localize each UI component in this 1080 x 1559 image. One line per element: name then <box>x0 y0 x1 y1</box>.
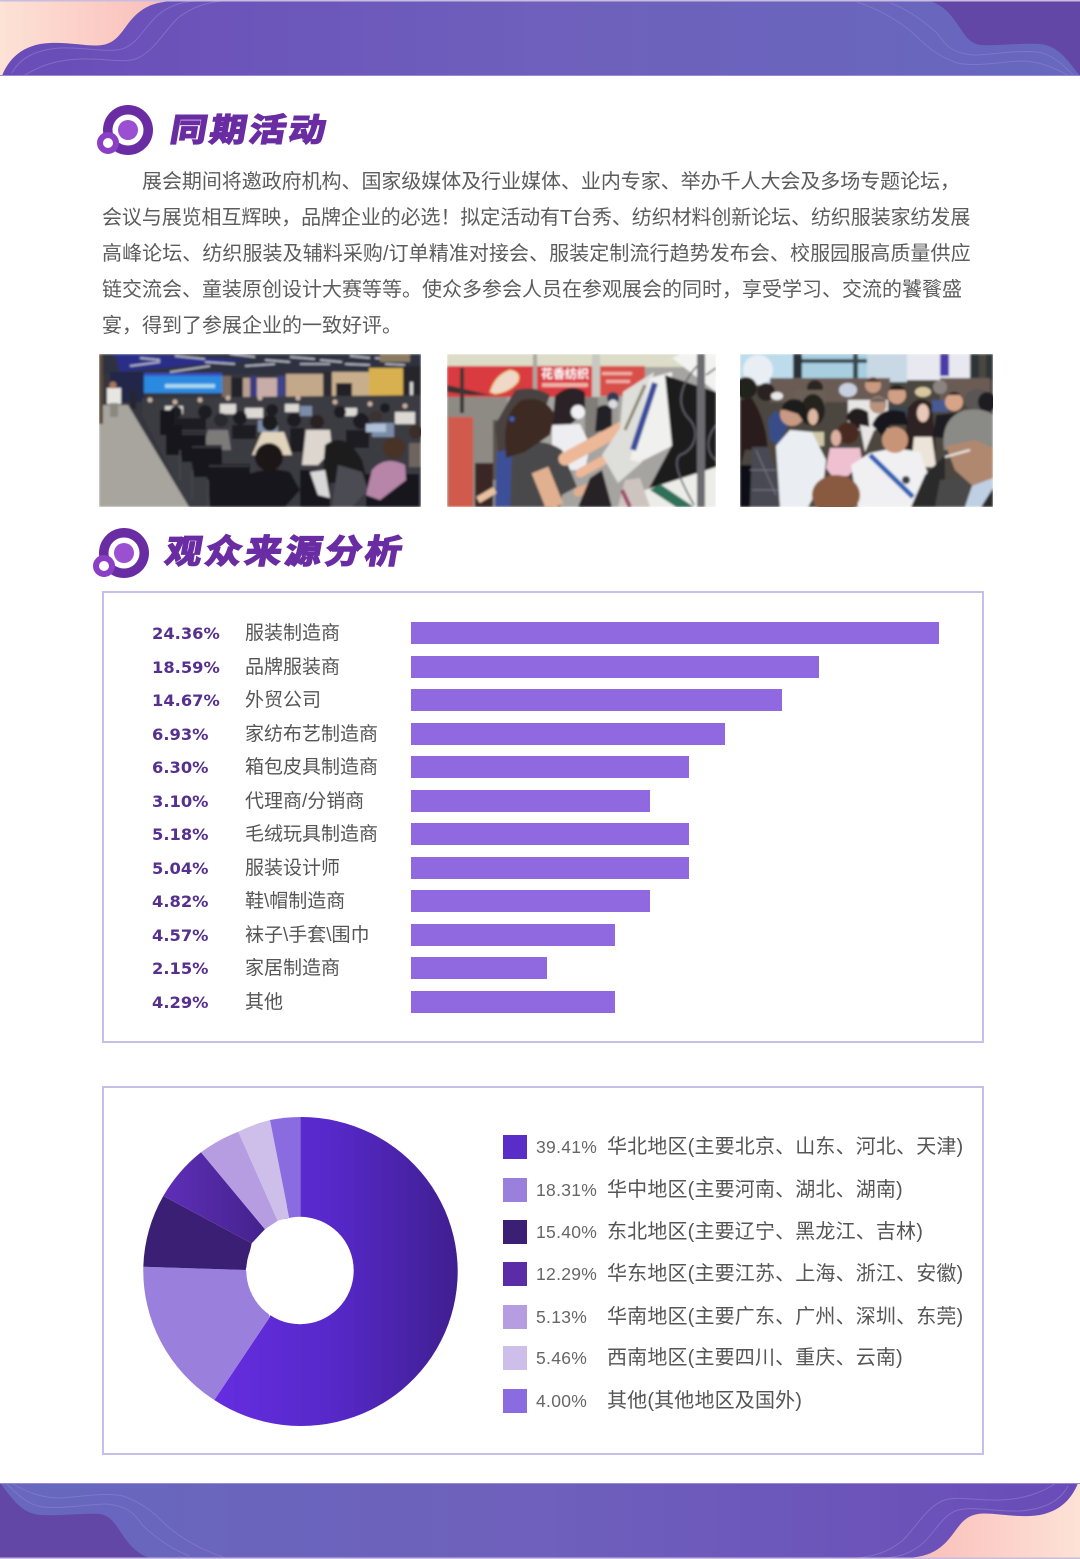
bar row: 服装制造商: 24.36% <box>152 624 220 643</box>
top banner <box>0 0 1080 76</box>
bar row: 服装设计师: 服装设计师 <box>245 858 340 879</box>
body paragraph: 会议与展览相互辉映，品牌企业的必选！拟定活动有T台秀、纺织材料创新论坛、纺织服装家纺发展 <box>102 207 970 229</box>
section heading: 观众来源分析 <box>93 528 409 578</box>
legend item: 华东地区: 华东地区(主要江苏、上海、浙江、安徽) <box>607 1263 963 1285</box>
bar row: 外贸公司: 14.67% <box>152 691 220 710</box>
body paragraph: 链交流会、童装原创设计大赛等等。使众多参会人员在参观展会的同时，享受学习、交流的饕餮盛 <box>102 279 962 301</box>
bar row: 代理商/分销商: 3.10% <box>152 792 208 811</box>
body paragraph: 宴，得到了参展企业的一致好评。 <box>102 315 402 337</box>
bar row: 家纺布艺制造商: 6.93% <box>152 725 208 744</box>
legend item: 华中地区 <box>503 1178 903 1202</box>
body paragraph: 展会期间将邀政府机构、国家级媒体及行业媒体、业内专家、举办千人大会及多场专题论坛， <box>142 171 960 193</box>
bar row: 品牌服装商 <box>152 656 819 678</box>
legend item: 西南地区: 西南地区(主要四川、重庆、云南) <box>607 1347 903 1369</box>
bar row: 鞋\帽制造商: 鞋\帽制造商 <box>245 891 345 912</box>
bar row: 鞋\帽制造商: 4.82% <box>152 892 208 911</box>
legend item: 华北地区: 华北地区(主要北京、山东、河北、天津) <box>607 1136 963 1158</box>
bar row: 毛绒玩具制造商: 毛绒玩具制造商 <box>245 824 378 845</box>
body paragraph <box>102 170 971 337</box>
bar row: 外贸公司 <box>152 689 782 711</box>
bar row: 服装设计师 <box>152 857 689 879</box>
legend item: 华中地区: 18.31% <box>536 1180 597 1200</box>
bar row: 袜子\手套\围巾: 袜子\手套\围巾 <box>245 925 370 946</box>
legend item: 其他 <box>503 1389 802 1413</box>
bar row: 鞋\帽制造商 <box>152 890 650 912</box>
heading text: 观众来源分析 <box>163 533 409 570</box>
heading text: 同期活动 <box>168 112 332 148</box>
body paragraph: 高峰论坛、纺织服装及辅料采购/订单精准对接会、服装定制流行趋势发布会、校服园服高质量供应 <box>102 243 971 265</box>
bar row: 代理商/分销商: 代理商/分销商 <box>245 791 364 812</box>
bar row: 袜子\手套\围巾: 4.57% <box>152 926 208 945</box>
legend item: 其他: 4.00% <box>536 1391 587 1411</box>
legend item: 其他: 其他(其他地区及国外) <box>607 1390 802 1412</box>
bar row: 外贸公司: 外贸公司 <box>245 690 321 711</box>
bar row: 家居制造商: 2.15% <box>152 959 208 978</box>
bottom banner <box>0 1483 1080 1559</box>
icon: ring logo <box>97 105 153 155</box>
bar row: 其他 <box>152 991 615 1013</box>
panel: visitor region donut chart and legend <box>102 1086 984 1455</box>
legend item: 华中地区: 华中地区(主要河南、湖北、湖南) <box>607 1179 903 1201</box>
bar row: 服装设计师: 5.04% <box>152 859 208 878</box>
photo: conference hall audience <box>99 354 421 507</box>
donut chart <box>143 1117 458 1426</box>
section heading: 同期活动 <box>97 105 332 155</box>
legend <box>503 1135 963 1413</box>
legend item: 西南地区: 5.46% <box>536 1348 587 1368</box>
legend item: 东北地区 <box>503 1220 923 1244</box>
bar row: 毛绒玩具制造商 <box>152 823 689 845</box>
bar row: 家居制造商: 家居制造商 <box>245 958 340 979</box>
bar row: 箱包皮具制造商: 箱包皮具制造商 <box>245 757 378 778</box>
bar row: 代理商/分销商 <box>152 790 650 812</box>
panel: audience type bar chart <box>102 591 984 1043</box>
bar row: 品牌服装商: 18.59% <box>152 658 220 677</box>
bar row: 其他: 其他 <box>245 992 283 1013</box>
legend item: 西南地区 <box>503 1346 903 1370</box>
photo: women examining fabric <box>447 354 716 507</box>
bar row: 家纺布艺制造商 <box>152 723 725 745</box>
photo: women examining fabric: 花香纺织 <box>541 366 589 381</box>
legend item: 华南地区: 华南地区(主要广东、广州、深圳、东莞) <box>607 1306 963 1328</box>
bar row: 箱包皮具制造商 <box>152 756 689 778</box>
bar row: 其他: 4.29% <box>152 993 208 1012</box>
bar row: 箱包皮具制造商: 6.30% <box>152 758 208 777</box>
bar row: 家居制造商 <box>152 957 547 979</box>
legend item: 东北地区: 东北地区(主要辽宁、黑龙江、吉林) <box>607 1221 923 1243</box>
legend item: 华北地区: 39.41% <box>536 1137 597 1157</box>
bar row: 品牌服装商: 品牌服装商 <box>245 657 340 678</box>
bar row: 服装制造商: 服装制造商 <box>245 623 340 644</box>
legend item: 华东地区: 12.29% <box>536 1264 597 1284</box>
bar row: 服装制造商 <box>152 622 939 644</box>
bar row: 家纺布艺制造商: 家纺布艺制造商 <box>245 724 378 745</box>
bar row: 袜子\手套\围巾 <box>152 924 615 946</box>
legend item: 东北地区: 15.40% <box>536 1222 597 1242</box>
photo: crowd of visitors <box>740 354 993 507</box>
icon: ring logo <box>93 528 149 578</box>
legend item: 华南地区: 5.13% <box>536 1307 587 1327</box>
bar row: 毛绒玩具制造商: 5.18% <box>152 825 208 844</box>
